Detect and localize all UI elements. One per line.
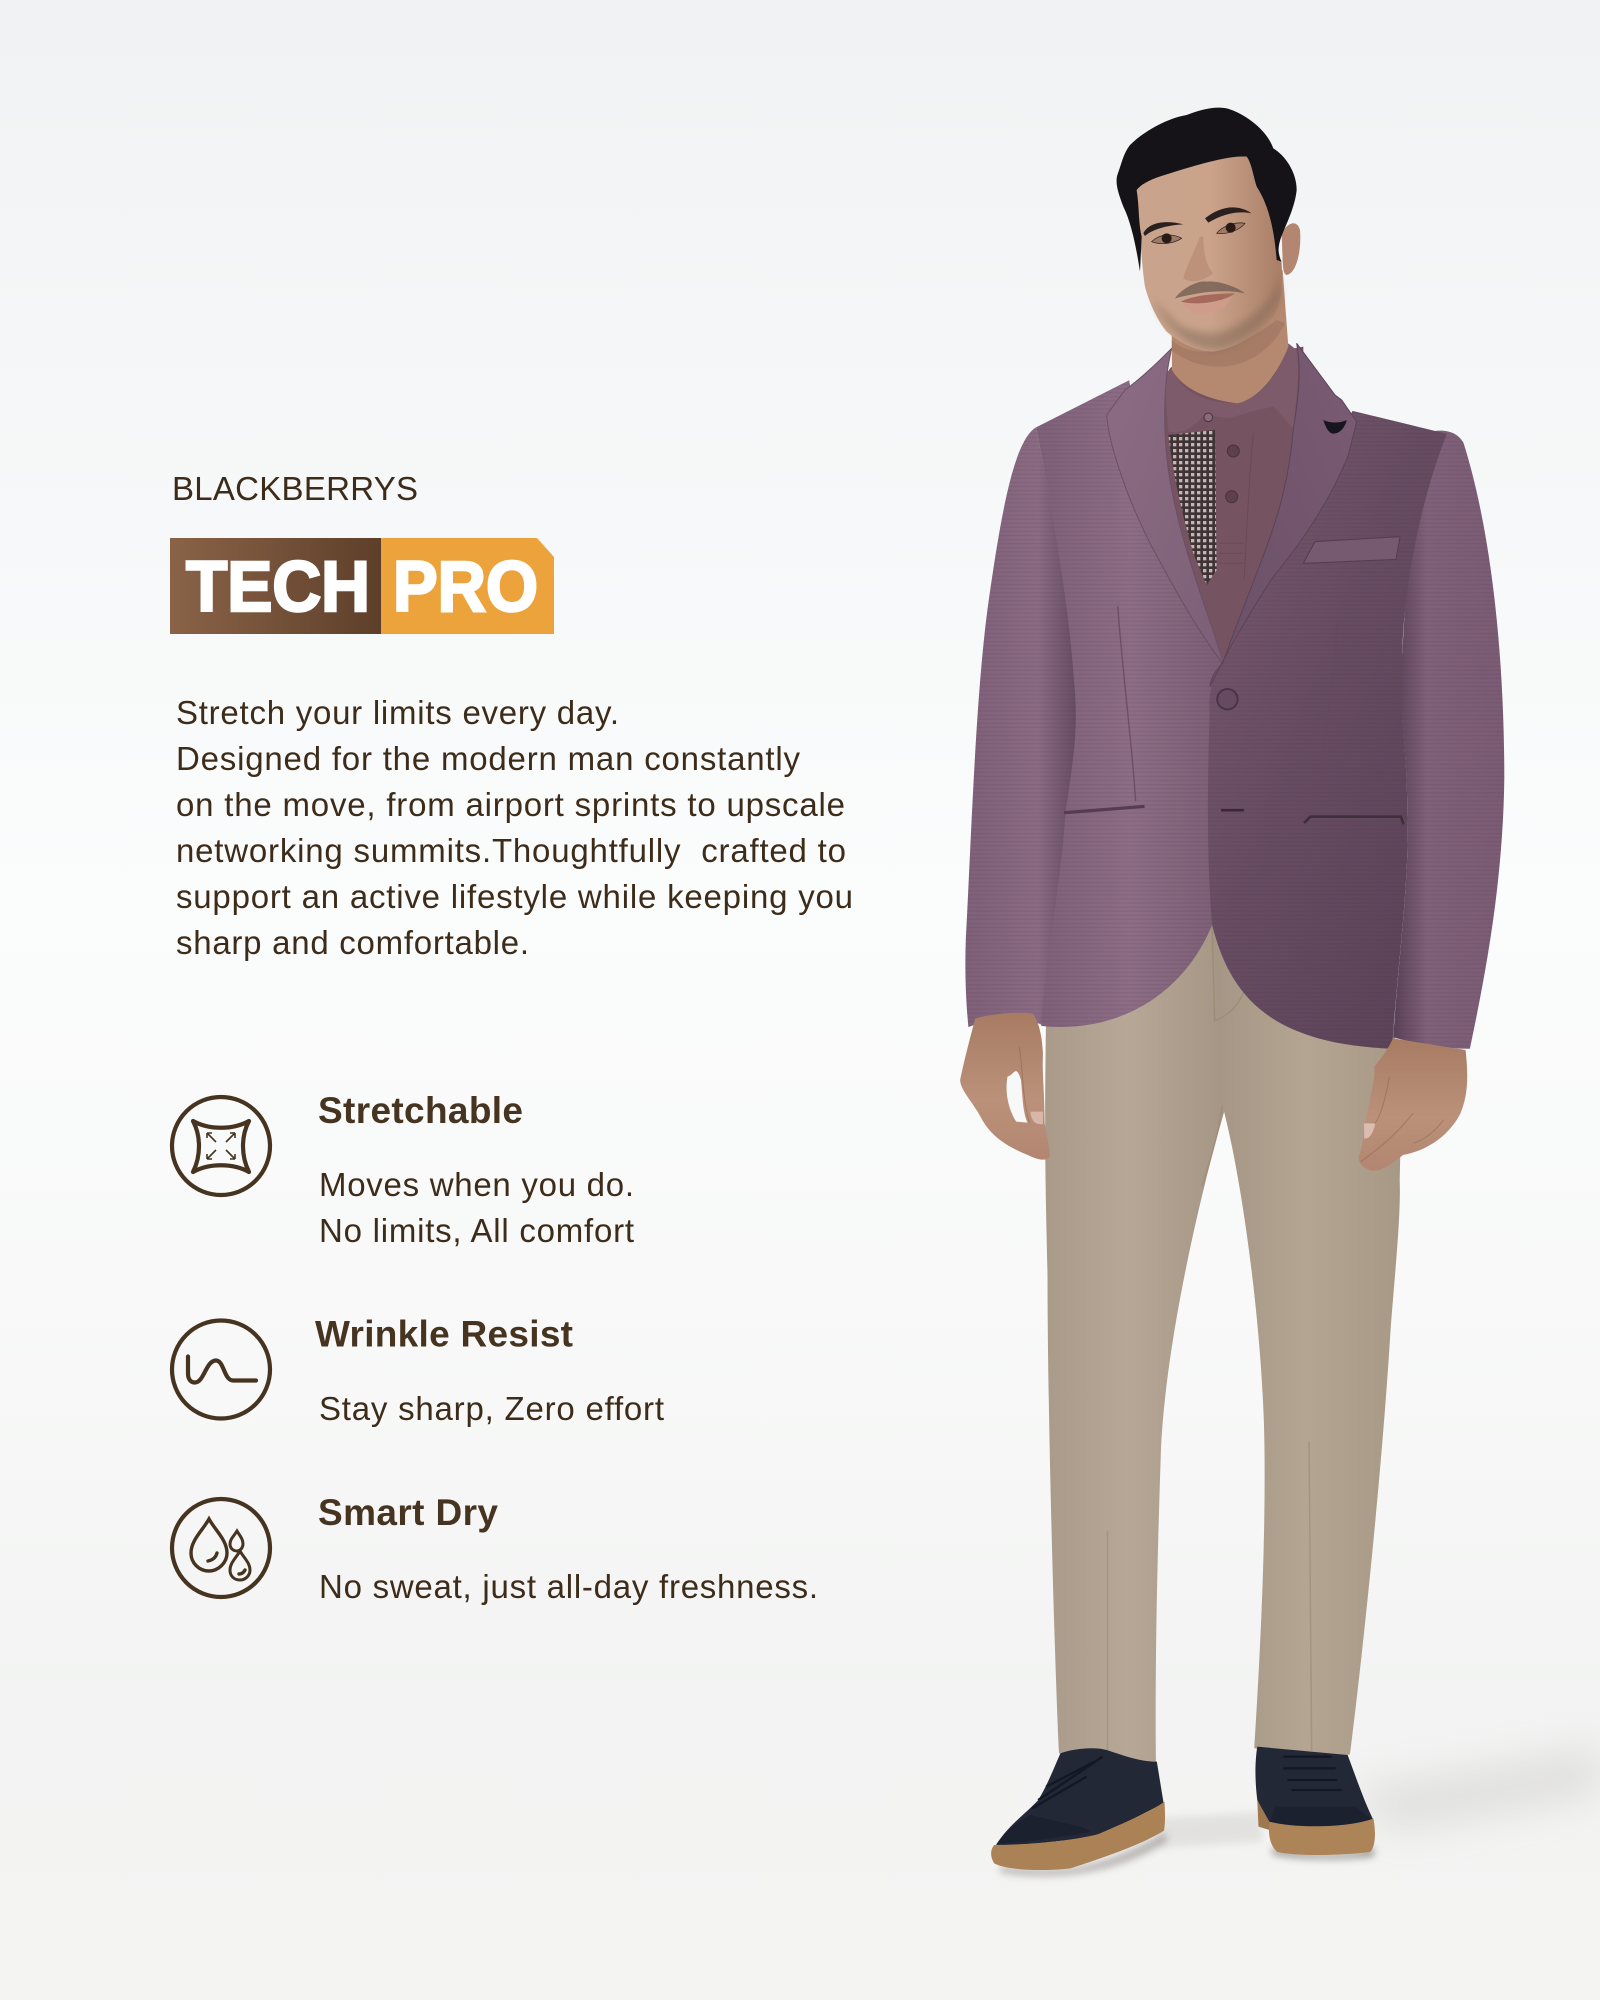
hands [960,1013,1467,1171]
shirt buttons [1227,445,1239,457]
moustache [1175,281,1245,298]
blazer [957,370,1518,1059]
right lapel [1210,343,1357,687]
left hand [960,1013,1050,1160]
intro paragraph: support an active lifestyle while keeping you [176,878,853,915]
face [1137,156,1282,352]
TECH PRO logo: TECH [186,548,370,627]
lapel pin [1323,420,1347,434]
polo shirt and lapels [1107,343,1400,687]
beard stubble [1153,277,1280,351]
intro paragraph [176,694,853,961]
feature: smart dry [172,1492,818,1605]
description: Moves when you do. [319,1166,634,1203]
hair [1117,108,1297,272]
left sleeve [965,427,1087,1027]
buttonhole [1221,809,1244,811]
button [1217,689,1238,709]
icon: water drops [172,1499,270,1597]
heading: Smart Dry [318,1492,498,1533]
floor shadows [1000,1745,1600,1876]
feature: stretchable [172,1090,634,1249]
intro paragraph: networking summits.Thoughtfully crafted to [176,832,846,869]
polo shirt [1157,343,1303,663]
heading: Stretchable [318,1090,523,1131]
nose [1183,237,1213,281]
ear [1282,223,1300,275]
intro paragraph: Designed for the modern man constantly [176,740,800,777]
eyes [1152,223,1245,244]
chest pocket [1303,537,1400,563]
right shoe [1255,1747,1375,1855]
eyebrows [1143,207,1252,236]
neck [1172,270,1288,403]
shoes [991,1747,1375,1870]
intro paragraph: on the move, from airport sprints to upscale [176,786,845,823]
head [1117,108,1300,403]
intro paragraph: sharp and comfortable. [176,924,529,961]
chin shadow [1172,320,1285,367]
waist pockets [1064,806,1145,813]
right sleeve [1393,431,1504,1049]
left front panel [1036,380,1225,1027]
heading: Wrinkle Resist [315,1314,573,1354]
patterned inner placket [1168,430,1217,585]
darts [1118,606,1337,801]
left lapel [1107,348,1224,665]
TECH PRO logo: PRO [393,548,538,627]
description [319,1166,634,1249]
collar [1165,343,1298,432]
right hand [1359,1038,1467,1171]
lips [1181,293,1235,303]
description: No limits, All comfort [319,1212,634,1249]
icon: smooth line [172,1320,270,1418]
description: No sweat, just all-day freshness. [319,1568,818,1605]
photo: model wearing blazer and trousers [957,108,1600,1876]
TECH PRO logo [170,538,554,634]
description: Stay sharp, Zero effort [319,1390,664,1427]
right front panel [1208,411,1447,1049]
ribbed texture [972,429,1044,1026]
feature: wrinkle resist [172,1314,664,1427]
trousers [1045,919,1400,1767]
intro paragraph: Stretch your limits every day. [176,694,619,731]
left shoe [991,1748,1165,1870]
icon: stretch fabric [172,1097,270,1195]
brand name: BLACKBERRYS [172,470,418,507]
